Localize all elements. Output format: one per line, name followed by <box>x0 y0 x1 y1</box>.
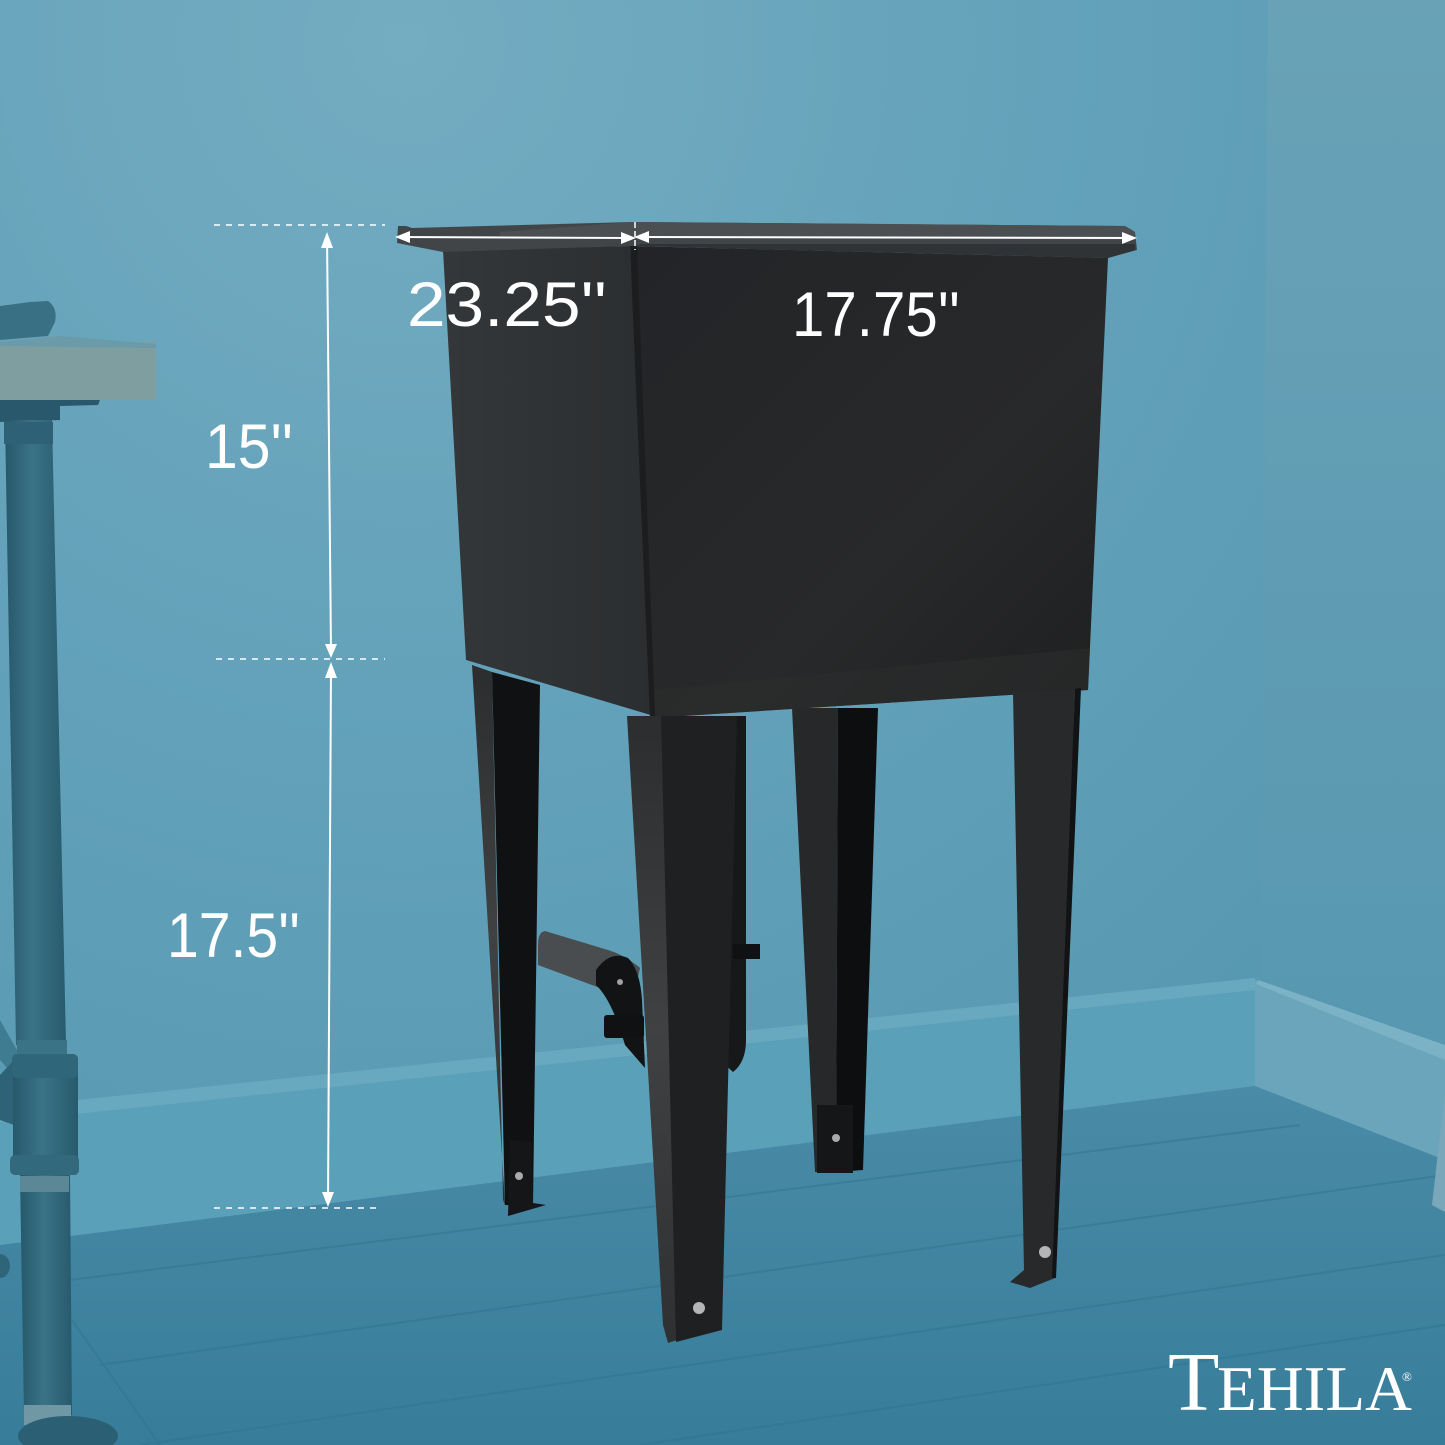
table with pipe leg <box>0 301 1445 1445</box>
dimension: width 17.75 inches <box>634 231 1137 350</box>
brand logo: ® <box>1402 1369 1412 1384</box>
back legs <box>472 665 878 1216</box>
brand logo <box>1168 1336 1412 1429</box>
dimension: width 17.75 inches: 17.75'' <box>792 280 960 350</box>
front legs <box>627 688 1081 1343</box>
dimension: sink height 15 inches: 15'' <box>205 412 293 482</box>
sink rim <box>397 222 1137 258</box>
dimension: depth 23.25 inches <box>395 222 636 340</box>
dimension: leg height 17.5 inches: 17.5'' <box>167 901 300 971</box>
dimension: leg height 17.5 inches <box>167 662 382 1208</box>
brand logo: EHILA <box>1217 1353 1412 1424</box>
dimension: sink height 15 inches <box>205 225 385 659</box>
brand logo: T <box>1168 1336 1219 1429</box>
dimension: depth 23.25 inches: 23.25'' <box>407 270 607 340</box>
sink basin <box>443 246 1108 718</box>
drain pipe <box>538 716 760 1072</box>
